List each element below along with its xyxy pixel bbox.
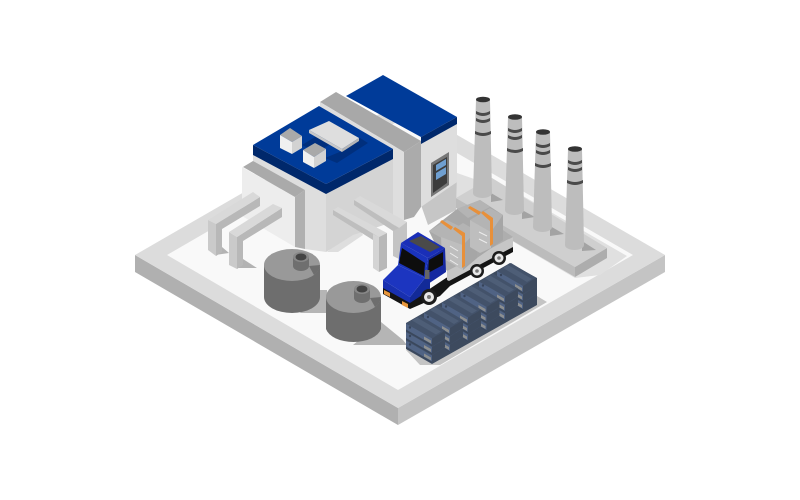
headlights bbox=[384, 290, 408, 308]
pipes left bbox=[208, 192, 282, 269]
brick stacks bbox=[406, 263, 537, 364]
base platform bbox=[135, 102, 665, 425]
chassis bbox=[383, 245, 513, 309]
tank 2 bbox=[326, 281, 407, 345]
cab bbox=[383, 232, 446, 303]
chimney 3 bbox=[533, 129, 564, 236]
chimney 1 bbox=[473, 97, 503, 202]
blue roof bbox=[253, 106, 393, 184]
chimney platform bbox=[456, 173, 627, 278]
roof shadows bbox=[325, 138, 368, 163]
roof box 1 bbox=[280, 128, 302, 154]
chimney 2 bbox=[505, 114, 535, 219]
left walls bbox=[242, 167, 295, 247]
building ground shadow bbox=[240, 182, 473, 252]
pallet shadow bbox=[406, 296, 547, 365]
chimney 4 bbox=[565, 146, 596, 251]
flatbed bbox=[440, 228, 513, 281]
front wheel bbox=[421, 289, 437, 305]
roof box 2 bbox=[303, 143, 326, 168]
factory building bbox=[242, 75, 457, 252]
tank 1 bbox=[264, 249, 327, 313]
rear tower bbox=[320, 75, 457, 222]
roof panel bbox=[309, 121, 359, 152]
rear wheels bbox=[470, 251, 506, 278]
right wall bbox=[326, 155, 393, 252]
door bbox=[431, 152, 449, 197]
pipes right bbox=[333, 196, 407, 272]
truck bbox=[383, 200, 513, 309]
cargo boxes bbox=[429, 200, 503, 270]
